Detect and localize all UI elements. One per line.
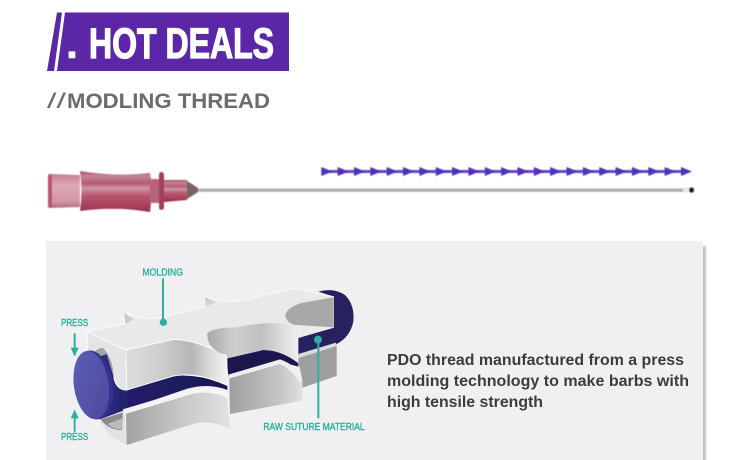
upper mold left face xyxy=(88,332,127,390)
rod body xyxy=(87,354,227,419)
front edge highlight xyxy=(295,325,333,338)
top notch shading left xyxy=(124,312,134,324)
callout: molding xyxy=(142,268,183,326)
far end of suture rod xyxy=(298,290,354,356)
upper right notch wall xyxy=(285,297,333,327)
hub collar xyxy=(159,172,164,210)
hub nose xyxy=(187,181,198,199)
callout: raw suture material: RAW SUTURE MATERIAL xyxy=(263,422,365,433)
top notch shading centre xyxy=(205,296,216,307)
hub grip xyxy=(80,171,152,212)
callout: press top with arrow xyxy=(61,318,88,357)
upper mold front lobe xyxy=(126,339,227,390)
callout: press bottom with arrow xyxy=(61,409,88,443)
rod end cap xyxy=(69,348,117,422)
hub rear barrel xyxy=(48,174,80,208)
description text: molding technology to make barbs with xyxy=(387,373,689,390)
banner: hot deals xyxy=(47,12,289,71)
lower mold block right xyxy=(298,345,337,388)
lower bore xyxy=(101,413,123,430)
banner block xyxy=(57,12,289,71)
banner dot: . xyxy=(66,20,78,68)
lower mold block centre xyxy=(229,363,302,414)
callout: raw suture material xyxy=(263,336,365,433)
needle shaft xyxy=(195,188,683,192)
lower mold block front xyxy=(126,392,230,445)
upper mold top face xyxy=(88,288,333,350)
panel shadow xyxy=(702,246,706,460)
barbed purple thread xyxy=(321,167,692,176)
middle suture band xyxy=(227,350,298,377)
banner title: HOT DEALS xyxy=(89,20,274,68)
panel: press molding explanation xyxy=(46,241,706,460)
hub neck xyxy=(150,179,160,203)
description text: high tensile strength xyxy=(387,394,543,411)
callout: press bottom with arrow: PRESS xyxy=(61,432,88,443)
subtitle: MODLING THREAD xyxy=(67,89,270,113)
description text: PDO thread manufactured from a press xyxy=(387,352,684,369)
upper mold second lobe xyxy=(207,323,297,362)
hub front xyxy=(164,180,187,202)
description text xyxy=(387,352,689,411)
diagram: press molding xyxy=(61,268,365,445)
needle with cannula hub xyxy=(48,171,694,212)
lower left face xyxy=(100,411,127,445)
upper bore xyxy=(92,348,114,378)
banner stripe xyxy=(47,12,62,71)
panel background xyxy=(46,241,703,460)
callout: molding: MOLDING xyxy=(142,268,183,279)
needle tip xyxy=(689,187,694,193)
callout: press top with arrow: PRESS xyxy=(61,318,88,329)
subtitle: // xyxy=(47,89,66,113)
metal and suture illustration xyxy=(69,288,354,445)
